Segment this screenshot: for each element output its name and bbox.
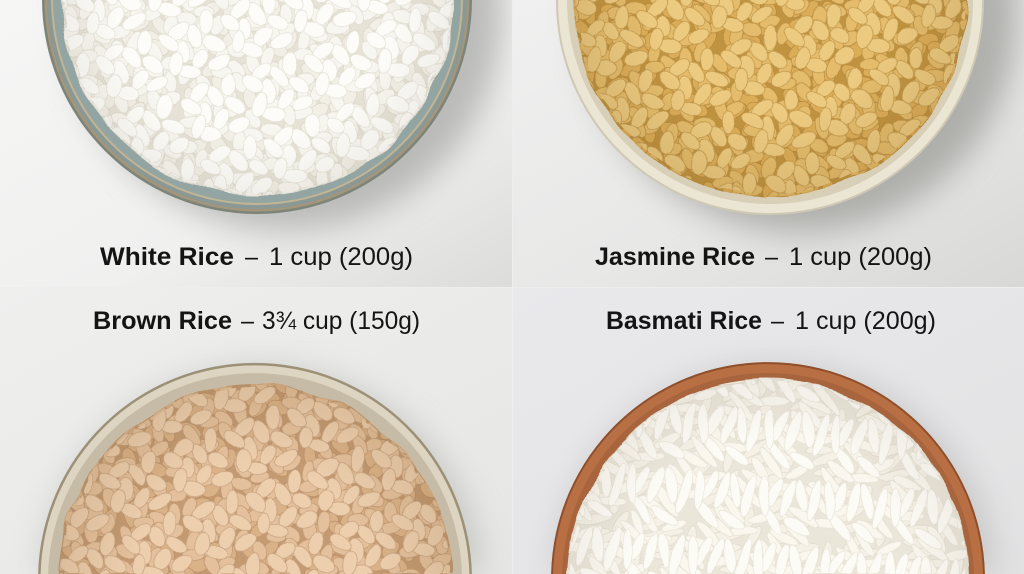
label: brown rice: 3¾ cup (150g) (262, 307, 420, 335)
label: basmati rice: Basmati Rice (606, 307, 762, 335)
bowl: jasmine rice bowl (556, 0, 984, 215)
label: white rice: White Rice (100, 243, 234, 271)
label: white rice (100, 247, 412, 270)
label: jasmine rice: – (765, 243, 778, 271)
bowl: basmati rice bowl (551, 362, 985, 574)
panel: basmati rice (513, 288, 1024, 574)
panel: jasmine rice (513, 0, 1024, 287)
rice: basmati grains (567, 379, 969, 574)
label: brown rice: Brown Rice (93, 307, 232, 335)
rice: brown grains (57, 384, 453, 574)
rice: white grains (61, 0, 453, 196)
label: basmati rice (608, 311, 934, 334)
bowl: white rice bowl (42, 0, 472, 214)
label: basmati rice: – (771, 307, 784, 335)
panel: brown rice (24, 311, 512, 574)
bowl: brown rice bowl (38, 363, 472, 574)
panel: white rice (0, 0, 512, 287)
rice: jasmine grains (573, 0, 967, 197)
label: white rice: – (245, 243, 258, 271)
label: jasmine rice: Jasmine Rice (595, 243, 755, 271)
label: basmati rice: 1 cup (200g) (795, 307, 936, 335)
label: brown rice (94, 311, 418, 334)
label: jasmine rice (595, 247, 930, 270)
label: white rice: 1 cup (200g) (269, 243, 413, 271)
label: jasmine rice: 1 cup (200g) (789, 243, 932, 271)
label: brown rice: – (241, 307, 254, 335)
